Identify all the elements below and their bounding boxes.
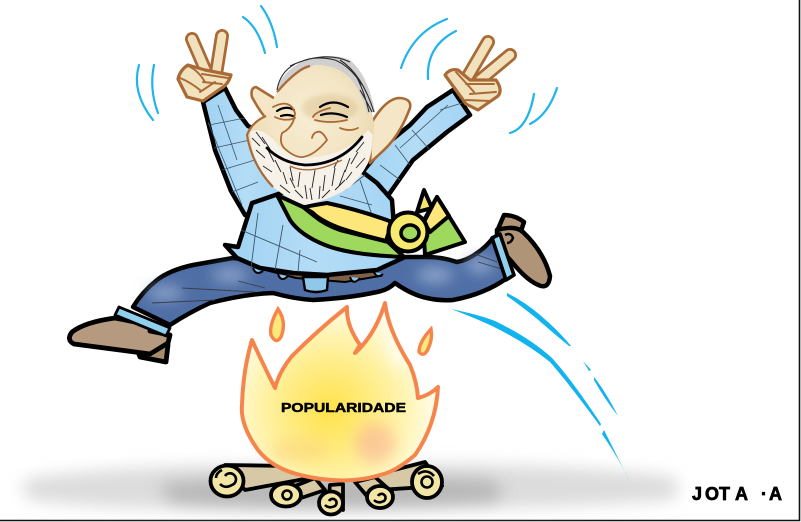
ground shadow bbox=[22, 464, 679, 509]
chin line bbox=[290, 160, 342, 170]
smile bbox=[267, 137, 362, 165]
flame spark left bbox=[271, 309, 283, 341]
sash rosette bbox=[388, 212, 428, 252]
left arm bbox=[203, 88, 290, 215]
face shading bbox=[302, 94, 358, 122]
signature: JOTA ·A bbox=[692, 484, 782, 504]
head and face bbox=[247, 56, 375, 205]
nose and face lines bbox=[273, 104, 358, 157]
flame outline bbox=[242, 303, 438, 480]
hair bbox=[277, 56, 375, 113]
left trouser cuff bbox=[115, 307, 170, 336]
belt buckle bbox=[303, 277, 328, 292]
shirt torso bbox=[225, 170, 403, 275]
belt bbox=[253, 268, 383, 292]
trouser highlights bbox=[147, 257, 494, 300]
right trouser cuff bbox=[492, 234, 514, 280]
flame label: POPULARIDADE bbox=[281, 400, 406, 415]
eyes bbox=[277, 102, 348, 117]
right hand: victory sign bbox=[445, 42, 510, 110]
motion lines: right hand bbox=[401, 19, 557, 133]
jump trajectory lines bbox=[451, 293, 632, 486]
flame bbox=[242, 303, 438, 480]
flame warm glow bbox=[355, 423, 395, 463]
motion lines: left hand bbox=[137, 6, 277, 120]
right arm bbox=[360, 90, 470, 197]
right boot bbox=[497, 215, 550, 286]
left hand: victory sign bbox=[178, 36, 231, 101]
fire logs bbox=[210, 462, 442, 514]
face outline bbox=[247, 66, 310, 187]
sash ribbons bbox=[417, 190, 465, 255]
presidential sash bbox=[277, 195, 404, 257]
flame spark right bbox=[419, 329, 432, 354]
trousers bbox=[133, 238, 507, 325]
beard bbox=[250, 130, 373, 205]
left boot bbox=[69, 318, 170, 362]
beard hatching bbox=[252, 132, 365, 200]
log end spirals bbox=[216, 470, 434, 507]
ears bbox=[252, 87, 410, 163]
